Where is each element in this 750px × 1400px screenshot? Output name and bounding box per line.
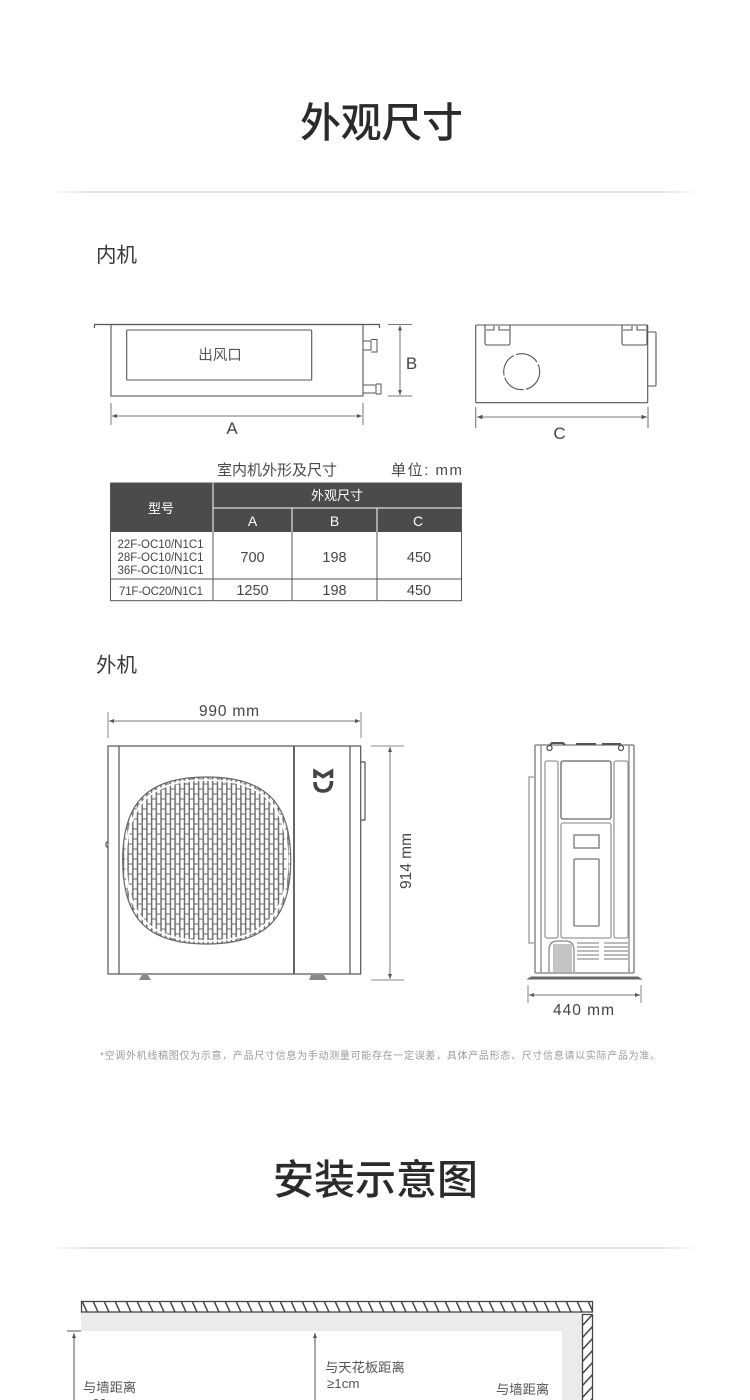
- dimension B: [388, 324, 412, 396]
- middle arrow: [314, 1333, 316, 1400]
- wall hatch: [582, 1314, 592, 1400]
- dimension: height 914 mm: 914 mm: [398, 833, 415, 889]
- Mijia logo: [315, 772, 332, 791]
- title: installation diagram: 安装示意图: [273, 1157, 478, 1203]
- table: indoor unit dimensions: C: [413, 513, 423, 529]
- diagram: outdoor unit front: [106, 746, 365, 980]
- table: indoor unit dimensions: [110, 483, 462, 601]
- diagram: installation clearances: [67, 1302, 592, 1400]
- table: indoor unit dimensions: 71F-OC20/N1C1: [119, 586, 203, 598]
- dimension: depth 440 mm: 440 mm: [553, 1002, 614, 1019]
- table: indoor unit dimensions: 700: [240, 550, 265, 566]
- table caption: 室内机外形及尺寸: [217, 462, 337, 479]
- dimension: depth 440 mm: [528, 985, 641, 1019]
- diagram: indoor unit side: [476, 325, 656, 428]
- dimension A: [111, 403, 363, 425]
- label: B: B: [406, 354, 417, 373]
- infographic canvas: [62, 102, 688, 1400]
- diagram: outdoor unit side: [528, 743, 641, 979]
- diagram: installation clearances: ≥1cm: [327, 1376, 359, 1391]
- table: indoor unit dimensions: 198: [322, 583, 347, 599]
- label: A: A: [226, 419, 238, 438]
- left wall clearance label: 与墙距离: [83, 1379, 136, 1395]
- dimension: width 990 mm: [108, 703, 361, 738]
- air outlet: [127, 330, 312, 380]
- table: indoor unit dimensions: 28F-OC10/N1C1: [118, 552, 204, 564]
- heading: outdoor unit: 外机: [96, 654, 137, 677]
- fan grille: [122, 776, 292, 946]
- ceiling hatch: [82, 1302, 592, 1312]
- table: indoor unit dimensions: 36F-OC10/N1C1: [118, 565, 204, 577]
- table: indoor unit dimensions: 型号: [148, 501, 174, 516]
- left arrow: [67, 1330, 81, 1332]
- heading: indoor unit: 内机: [96, 244, 137, 267]
- table: indoor unit dimensions: 22F-OC10/N1C1: [118, 539, 204, 551]
- dimension: width 990 mm: 990 mm: [199, 703, 259, 720]
- title: appearance dimensions: 外观尺寸: [300, 100, 463, 146]
- clearance band: [81, 1312, 582, 1400]
- label: C: C: [553, 424, 566, 443]
- dimension: height 914 mm: [371, 746, 415, 980]
- table: indoor unit dimensions: 198: [322, 550, 347, 566]
- table: indoor unit dimensions: B: [330, 513, 339, 529]
- label: air outlet: 出风口: [198, 347, 242, 364]
- diagram: indoor unit front: [94, 324, 412, 425]
- ceiling clearance label: 与天花板距离: [325, 1359, 405, 1375]
- table: indoor unit dimensions: A: [248, 513, 258, 529]
- table: indoor unit dimensions: 450: [407, 550, 431, 566]
- table: indoor unit dimensions: 外观尺寸: [311, 488, 363, 503]
- dimension C: [476, 407, 648, 428]
- table: indoor unit dimensions: 450: [407, 583, 431, 599]
- table: indoor unit dimensions: 1250: [236, 583, 269, 599]
- footnote: *空调外机线稿图仅为示意，产品尺寸信息为手动测量可能存在一定误差，具体产品形态、尺寸信息请以实际产品为准。: [100, 1049, 660, 1062]
- right wall clearance label: 与墙距离: [496, 1381, 549, 1397]
- table unit: 单位: mm: [391, 462, 462, 479]
